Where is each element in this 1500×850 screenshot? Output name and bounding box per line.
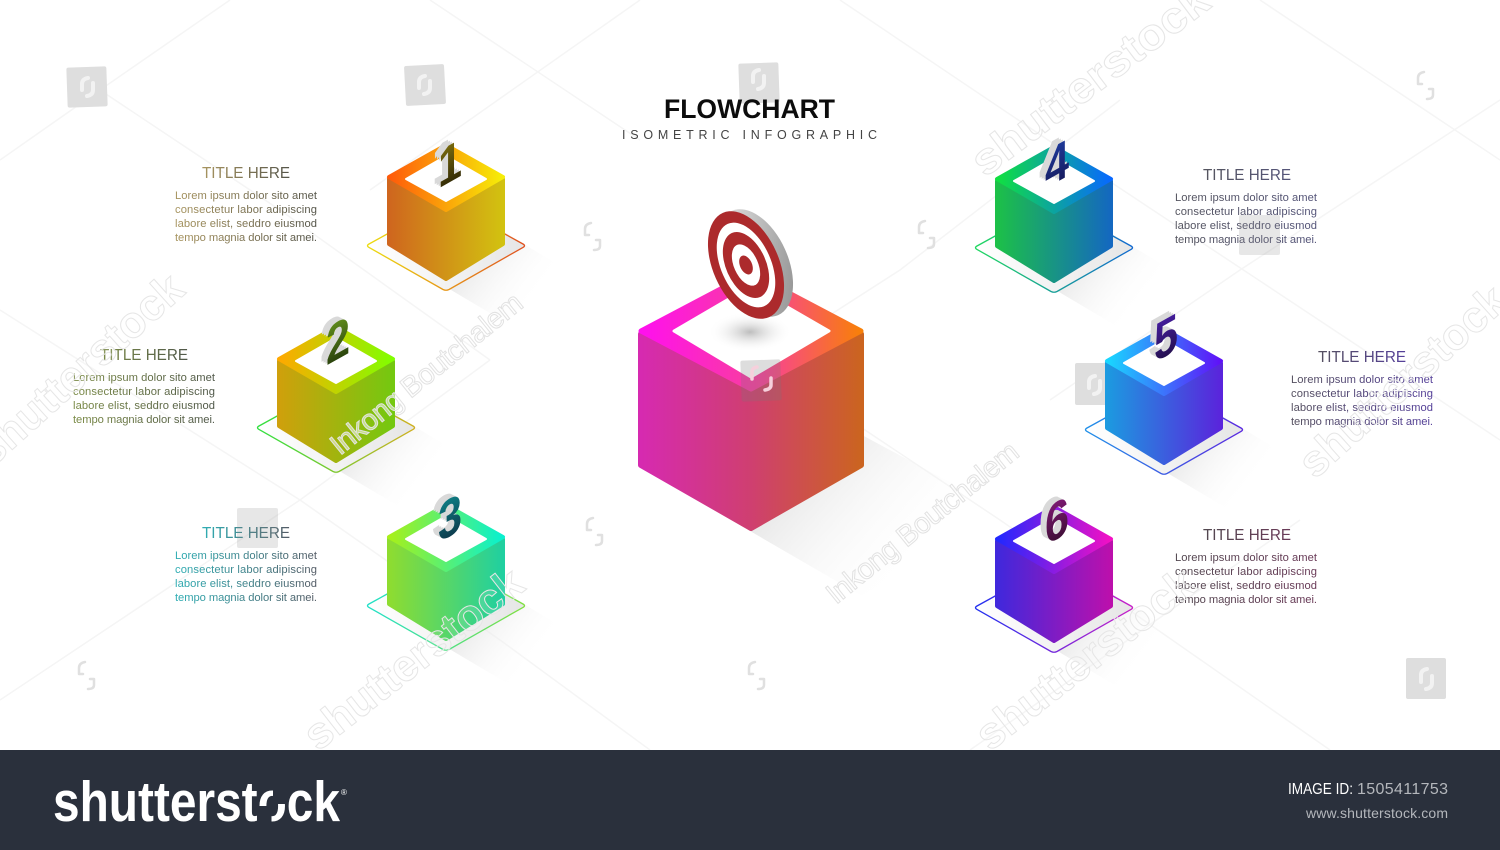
step 6 text: TITLE HERE <box>1203 527 1291 544</box>
step 4 text <box>1175 167 1318 246</box>
step 5 cube <box>1086 297 1293 509</box>
step 6 text: consectetur labor adipiscing <box>1175 566 1317 578</box>
step 4 text: labore elist, seddro eiusmod <box>1175 220 1317 232</box>
step 2 text: TITLE HERE <box>100 347 188 364</box>
step 1 text: Lorem ipsum dolor sito amet <box>175 190 318 202</box>
step 3 cube <box>368 477 575 685</box>
number 1: 1 <box>432 123 456 197</box>
number 6: 6 <box>1039 480 1063 554</box>
step 5 text: TITLE HERE <box>1318 349 1406 366</box>
watermark tiles <box>66 62 1446 699</box>
step 1 text: labore elist, seddro eiusmod <box>175 218 317 230</box>
image id: IMAGE ID: <box>1288 781 1353 798</box>
number 1: 1 <box>436 125 460 199</box>
number 1: 1 <box>434 124 458 198</box>
number 5: 5 <box>1152 299 1176 373</box>
number 5: 5 <box>1154 300 1178 374</box>
step 2 cube <box>258 300 465 507</box>
step 5 text: labore elist, seddro eiusmod <box>1291 402 1433 414</box>
step 5 text: Lorem ipsum dolor sito amet <box>1291 374 1434 386</box>
number 3: 3 <box>436 479 460 553</box>
step 3 text: Lorem ipsum dolor sito amet <box>175 550 318 562</box>
watermarks: shutterstock <box>294 558 533 760</box>
image id <box>1288 781 1448 798</box>
step 4 text: tempo magnia dolor sit amei. <box>1175 234 1317 246</box>
step 6 cube <box>976 480 1183 687</box>
step 3 text: labore elist, seddro eiusmod <box>175 578 317 590</box>
step 2 text: tempo magnia dolor sit amei. <box>73 414 215 426</box>
step 1 text: consectetur labor adipiscing <box>175 204 317 216</box>
footer logo: ® <box>341 788 347 797</box>
step 5 text <box>1291 349 1434 428</box>
step 4 text: TITLE HERE <box>1203 167 1291 184</box>
step 5 text: tempo magnia dolor sit amei. <box>1291 416 1433 428</box>
step 4 text: Lorem ipsum dolor sito amet <box>1175 192 1318 204</box>
number 6: 6 <box>1041 481 1065 555</box>
number 4: 4 <box>1045 126 1069 200</box>
number 4: 4 <box>1039 123 1063 197</box>
number 5: 5 <box>1150 298 1174 372</box>
footer bar <box>0 750 1500 850</box>
number 5: 5 <box>1148 297 1172 371</box>
number 2: 2 <box>324 302 348 376</box>
step 1 text <box>175 165 318 244</box>
step 2 text: consectetur labor adipiscing <box>73 386 215 398</box>
step 2 text: Lorem ipsum dolor sito amet <box>73 372 216 384</box>
central cube <box>641 198 1005 596</box>
title <box>622 94 877 142</box>
step 1 cube <box>368 123 575 325</box>
number 3: 3 <box>438 480 462 554</box>
number 4: 4 <box>1041 124 1065 198</box>
watermarks: shutterstock <box>966 558 1205 760</box>
step 1 text: TITLE HERE <box>202 165 290 182</box>
tile over central cube <box>740 359 782 402</box>
watermarks: Inkong Boutchalem <box>324 287 529 461</box>
tiles over text <box>237 215 1280 548</box>
step 6 text: Lorem ipsum dolor sito amet <box>1175 552 1318 564</box>
footer url: www.shutterstock.com <box>1305 805 1448 821</box>
step 5 text: consectetur labor adipiscing <box>1291 388 1433 400</box>
watermarks: Inkong Boutchalem <box>820 436 1025 610</box>
step 3 text: consectetur labor adipiscing <box>175 564 317 576</box>
number 2: 2 <box>320 300 344 374</box>
number 6: 6 <box>1045 483 1069 557</box>
number 2: 2 <box>326 303 350 377</box>
number 4: 4 <box>1043 125 1067 199</box>
step 2 text <box>73 347 216 426</box>
step 3 text: TITLE HERE <box>202 525 290 542</box>
image id: 1505411753 <box>1357 781 1448 798</box>
number 2: 2 <box>322 301 346 375</box>
number 1: 1 <box>438 126 462 200</box>
number 3: 3 <box>434 478 458 552</box>
icon: target <box>693 198 808 330</box>
step 4 text: consectetur labor adipiscing <box>1175 206 1317 218</box>
step 3 text <box>175 525 318 604</box>
footer logo: shutterstock <box>53 770 340 834</box>
step 2 text: labore elist, seddro eiusmod <box>73 400 215 412</box>
step 6 text: labore elist, seddro eiusmod <box>1175 580 1317 592</box>
subtitle: ISOMETRIC INFOGRAPHIC <box>622 128 877 142</box>
step 6 text <box>1175 527 1318 606</box>
title: FLOWCHART <box>664 94 835 124</box>
step 1 text: tempo magnia dolor sit amei. <box>175 232 317 244</box>
step 4 cube <box>976 123 1183 327</box>
number 6: 6 <box>1043 482 1067 556</box>
step 3 text: tempo magnia dolor sit amei. <box>175 592 317 604</box>
step 6 text: tempo magnia dolor sit amei. <box>1175 594 1317 606</box>
number 3: 3 <box>432 477 456 551</box>
